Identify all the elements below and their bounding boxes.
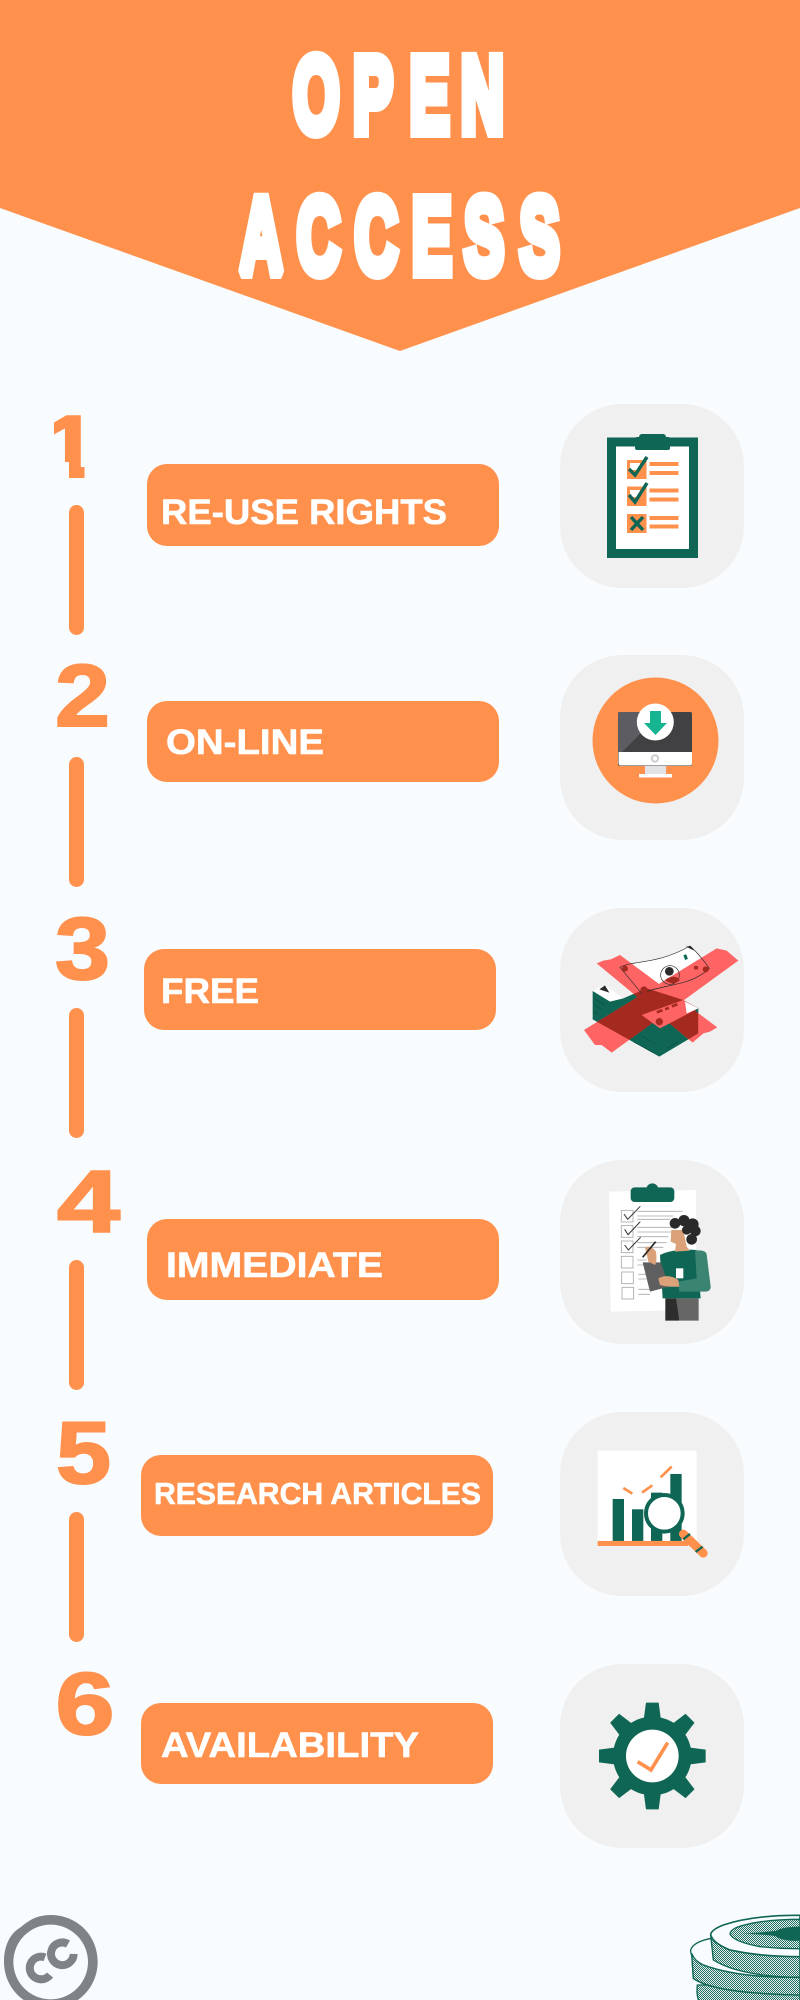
icon card 2: monitor download <box>560 655 744 840</box>
title: ACCESS <box>240 176 559 297</box>
icon card 5: bar chart with magnifier <box>560 1412 744 1596</box>
label 6: availability: AVAILABILITY <box>161 1726 419 1765</box>
connector line 2 <box>69 757 84 887</box>
label 4: immediate <box>147 1219 499 1300</box>
number 5: 5 <box>56 1403 111 1502</box>
label 5: research articles: RESEARCH ARTICLES <box>154 1476 481 1511</box>
label 4: immediate: IMMEDIATE <box>166 1246 383 1285</box>
icon card 6: gear with check <box>560 1664 744 1848</box>
cc logo <box>4 1915 98 2000</box>
number 6: 6 <box>56 1654 114 1753</box>
icon card 4: person with checklist <box>560 1160 744 1344</box>
label 3: free <box>144 949 496 1030</box>
title <box>240 35 559 297</box>
number 3: 3 <box>55 899 110 998</box>
connector line 4 <box>69 1260 84 1390</box>
connector line 3 <box>69 1008 84 1138</box>
number 4: 4 <box>57 1152 120 1251</box>
number 2: 2 <box>55 646 110 745</box>
connector line 1 <box>69 505 84 635</box>
label 3: free: FREE <box>161 972 259 1011</box>
label 2: on-line <box>147 701 499 782</box>
label 1: re-use rights <box>147 464 499 546</box>
connector line 5 <box>69 1512 84 1642</box>
number 1: 1 <box>43 397 98 496</box>
title: OPEN <box>293 35 504 156</box>
label 2: on-line: ON-LINE <box>166 723 324 762</box>
icon card 3: crossed-out money <box>560 908 744 1092</box>
label 5: research articles <box>141 1455 493 1536</box>
label 1: re-use rights: RE-USE RIGHTS <box>161 493 447 532</box>
icon card 1: checklist clipboard <box>560 404 744 588</box>
stacked coins illustration <box>691 1915 800 2000</box>
label 6: availability <box>141 1703 493 1784</box>
header banner <box>0 0 800 351</box>
